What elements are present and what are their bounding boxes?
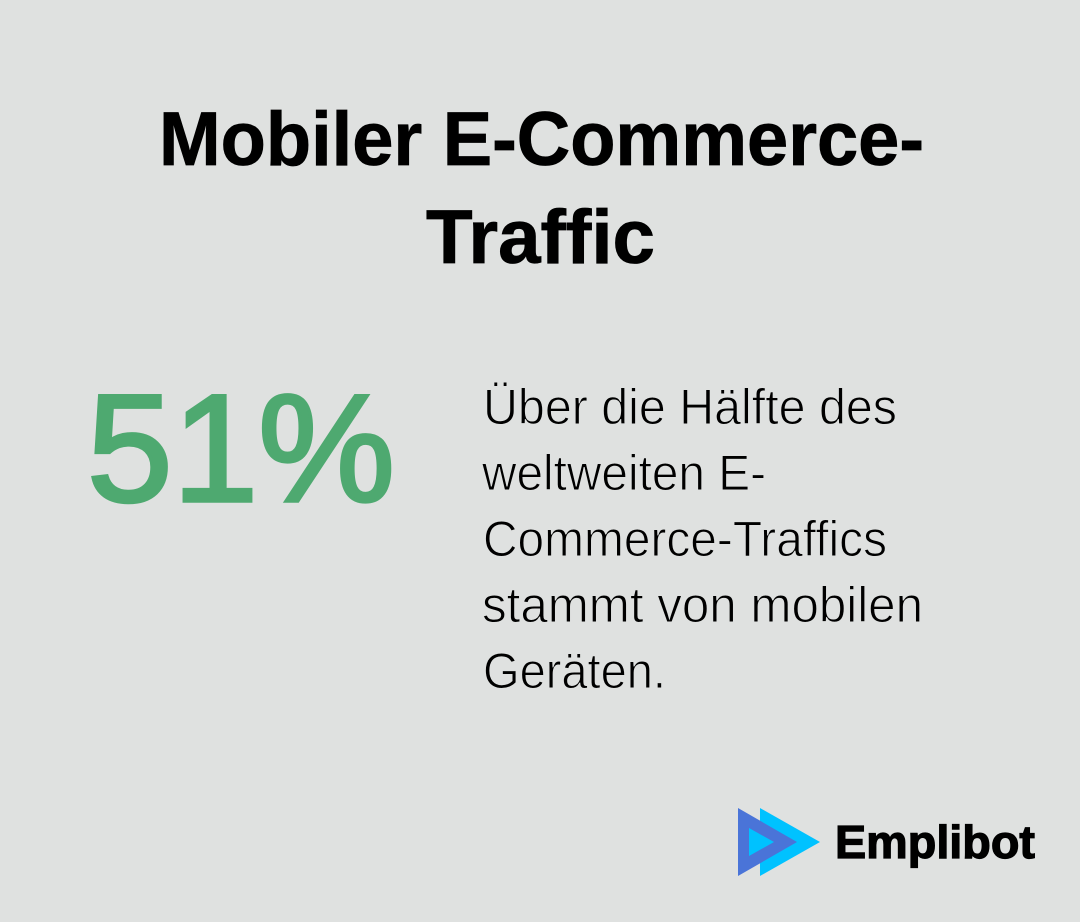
icon: play triangles [738, 808, 820, 876]
description text: Über die Hälfte des [483, 379, 897, 435]
title [159, 97, 924, 280]
description text [481, 379, 923, 699]
description text: Geräten. [483, 643, 666, 699]
statistic: 51%: 51% [87, 363, 395, 534]
description text: weltweiten E- [481, 445, 766, 501]
description text: Commerce-Traffics [483, 511, 887, 567]
description text: stammt von mobilen [482, 577, 923, 633]
logo: Emplibot [738, 808, 1035, 876]
logo wordmark: Emplibot [835, 816, 1035, 868]
title: Mobiler E-Commerce- [159, 97, 924, 182]
title: Traffic [426, 195, 655, 280]
